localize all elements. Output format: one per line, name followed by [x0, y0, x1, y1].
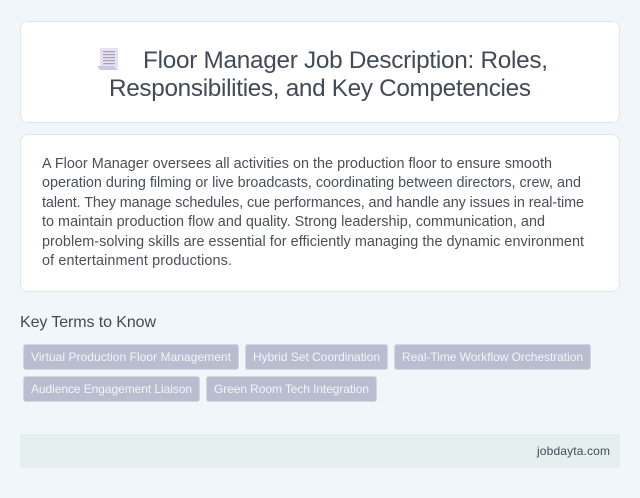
tag background: Audience Engagement Liaison	[23, 376, 200, 402]
footer bar	[20, 434, 620, 468]
description text: talent. They manage schedules, cue performances, and handle any issues in real-time	[42, 195, 584, 211]
tag background: Real-Time Workflow Orchestration	[394, 344, 591, 370]
tag background: Hybrid Set Coordination	[245, 344, 388, 370]
tag labels	[31, 350, 583, 396]
tag background: Green Room Tech Integration	[206, 376, 377, 402]
description text: of entertainment productions.	[42, 253, 232, 269]
description text: problem-solving skills are essential for efficiently managing the dynamic environment	[42, 234, 584, 250]
tag labels: Hybrid Set Coordination	[253, 350, 380, 364]
description text: to maintain production flow and quality. Strong leadership, communication, and	[42, 214, 545, 230]
tag labels: Virtual Production Floor Management	[31, 350, 232, 364]
footer text: jobdayta.com: jobdayta.com	[536, 444, 610, 458]
description text	[42, 156, 584, 269]
title: Floor Manager Job Description: Roles,	[143, 47, 548, 74]
heading: Key Terms to Know: Key Terms to Know	[20, 314, 156, 331]
tag background: Virtual Production Floor Management	[23, 344, 239, 370]
title	[109, 47, 548, 102]
tag labels: Green Room Tech Integration	[214, 382, 369, 396]
panel: title card	[20, 21, 620, 123]
icon: document scroll	[98, 48, 120, 70]
tag labels: Audience Engagement Liaison	[31, 382, 192, 396]
description text: operation during filming or live broadcasts, coordinating between directors, crew, and	[42, 175, 581, 191]
panel: description card	[20, 134, 620, 292]
title: Responsibilities, and Key Competencies	[109, 75, 531, 102]
tag labels: Real-Time Workflow Orchestration	[402, 350, 583, 364]
description text: A Floor Manager oversees all activities on the production floor to ensure smooth	[42, 156, 552, 172]
